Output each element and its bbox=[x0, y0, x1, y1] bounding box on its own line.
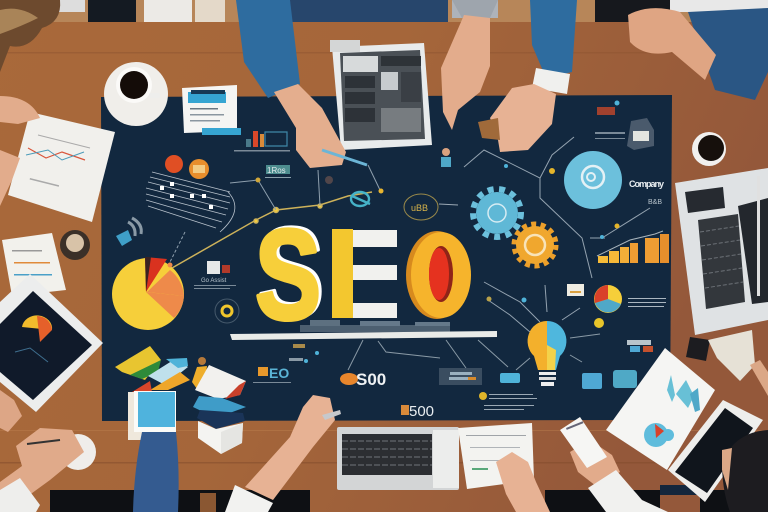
bottom blue sleeve bbox=[133, 432, 179, 512]
small node dots bbox=[256, 176, 384, 194]
small chart label bbox=[627, 340, 653, 352]
large pie chart bbox=[112, 257, 184, 330]
small image caption bbox=[194, 261, 236, 289]
small image caption: Go Assist bbox=[201, 278, 227, 284]
top right hand and sleeve bbox=[628, 8, 768, 100]
person icon bbox=[441, 148, 451, 167]
paragraph with yellow bullet bbox=[479, 392, 537, 410]
wire mesh data graphic bbox=[146, 172, 235, 232]
S00 stat bbox=[340, 370, 386, 389]
connector lines top left bbox=[170, 165, 380, 262]
blue gear bbox=[473, 189, 521, 237]
EO stat bbox=[253, 365, 291, 383]
left arm with blue sleeve bbox=[236, 0, 367, 168]
S00 stat: S00 bbox=[356, 370, 386, 389]
small image card bbox=[567, 284, 584, 296]
letter O bbox=[406, 231, 471, 319]
left chart paper bbox=[8, 112, 115, 222]
small stat label: 1Ros bbox=[267, 166, 286, 175]
network connector lines right bbox=[464, 137, 650, 332]
EO stat: EO bbox=[269, 365, 289, 381]
letter S: S bbox=[258, 202, 324, 345]
left hands bbox=[0, 96, 40, 206]
rising line graph bbox=[172, 192, 372, 268]
small pie chart right bbox=[594, 285, 666, 313]
dark clipboard icon bbox=[627, 118, 654, 150]
lower connector lines bbox=[348, 334, 600, 370]
dark phone bbox=[686, 337, 710, 361]
wifi icon bbox=[116, 218, 141, 246]
blue folder icon bbox=[582, 373, 602, 389]
right laptop bbox=[675, 168, 768, 335]
letter S: S bbox=[255, 204, 321, 347]
blue magnifier bbox=[351, 192, 370, 206]
right coffee cup bbox=[692, 132, 726, 166]
light bulb bbox=[528, 321, 566, 386]
label box bbox=[439, 368, 482, 385]
SEO lettering bbox=[255, 202, 471, 347]
yellow figure bbox=[192, 357, 207, 389]
stack of colourful cards bbox=[115, 346, 190, 440]
navy SEO poster board bbox=[101, 95, 672, 421]
people and chairs behind the top edge bbox=[0, 0, 768, 22]
blue card icon bbox=[613, 370, 637, 388]
top left hair bbox=[0, 0, 60, 72]
small stat label bbox=[265, 165, 291, 178]
coffee cup on saucer bbox=[104, 62, 168, 126]
yellow dot bbox=[594, 318, 604, 328]
bottom left saucer bbox=[60, 434, 96, 470]
bottom left hand and cuff bbox=[0, 390, 84, 512]
connector node dots bbox=[486, 164, 620, 302]
left note paper bbox=[2, 233, 66, 296]
open folder with report bbox=[606, 348, 763, 502]
note paper right bbox=[708, 330, 755, 381]
bottom paper with form bbox=[458, 423, 534, 489]
center tablet bbox=[330, 40, 432, 150]
company label: Company bbox=[629, 179, 664, 189]
report card bbox=[182, 85, 241, 135]
hand holding phone bbox=[560, 417, 668, 512]
letter E bbox=[332, 229, 397, 318]
orange and red circle badges bbox=[165, 155, 209, 179]
bottom hand on paper bbox=[496, 452, 550, 512]
small captions bbox=[289, 344, 319, 363]
500 stat: 500 bbox=[409, 403, 434, 420]
small text top right: B&B bbox=[648, 199, 662, 206]
bar chart icon near tablet bbox=[234, 131, 290, 152]
bottom center arm writing bbox=[225, 395, 341, 512]
tape roll bbox=[60, 230, 90, 260]
left tablet bbox=[0, 274, 103, 412]
skyline base under SEO bbox=[230, 320, 497, 340]
dark floor along the bottom edge bbox=[50, 485, 768, 512]
orange gear bbox=[514, 224, 556, 266]
blue tag bbox=[500, 373, 520, 383]
center hand pointing down bbox=[441, 0, 498, 130]
oval badge label: uBB bbox=[411, 203, 428, 213]
oval badge label bbox=[404, 194, 458, 220]
small text top right bbox=[595, 100, 662, 206]
yellow growth bars bbox=[597, 231, 669, 263]
right edge hand bbox=[750, 360, 768, 396]
yellow ring icon bbox=[215, 299, 239, 323]
stacked boxes bbox=[193, 365, 246, 454]
right arm with cuff and hand bbox=[478, 0, 577, 152]
seated person with dark hair bbox=[722, 430, 768, 512]
target circle bbox=[564, 151, 622, 209]
bottom laptop bbox=[337, 427, 459, 490]
